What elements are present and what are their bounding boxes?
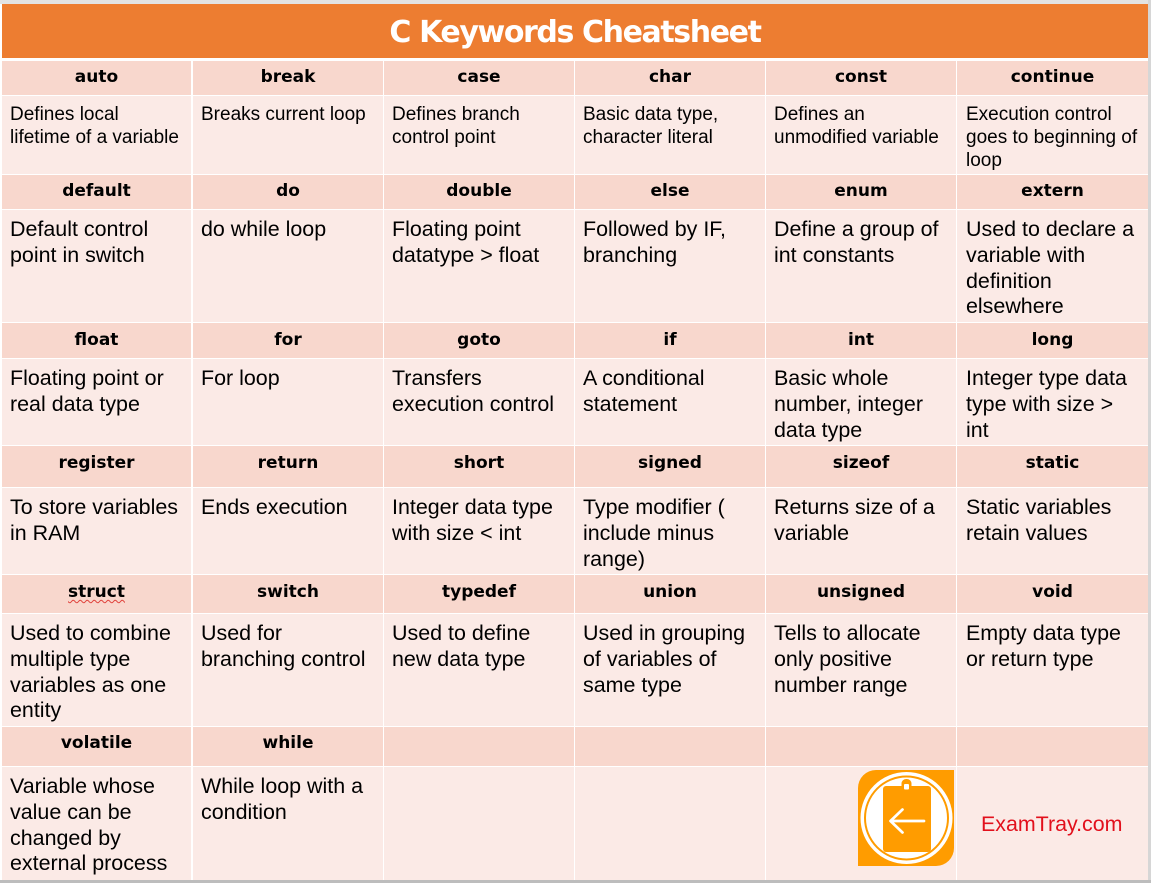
- keyword: const: const: [835, 67, 887, 87]
- description: typedef: Used to define new data type: [392, 621, 530, 671]
- description: auto: Defines local lifetime of a variable: [10, 104, 179, 148]
- description: switch: Used for branching control: [201, 621, 365, 671]
- keyword: continue: [957, 61, 1148, 95]
- description: const: [766, 96, 956, 174]
- keyword: int: int: [848, 330, 874, 350]
- empty header cell 6: [957, 727, 1148, 766]
- description: if: [575, 359, 765, 445]
- keyword: union: [575, 575, 765, 613]
- description: sizeof: [766, 488, 956, 574]
- description: register: [2, 488, 191, 574]
- keyword: unsigned: unsigned: [817, 582, 905, 602]
- empty header cell 5: [766, 727, 956, 766]
- keyword: for: for: [274, 330, 302, 350]
- description: sizeof: Returns size of a variable: [774, 495, 935, 545]
- keyword: enum: enum: [834, 181, 888, 201]
- keyword: signed: [575, 446, 765, 487]
- description: break: Breaks current loop: [201, 104, 366, 125]
- description: for: [193, 359, 383, 445]
- keyword: typedef: [384, 575, 574, 613]
- keyword: void: [957, 575, 1148, 613]
- keyword: signed: signed: [638, 453, 702, 473]
- keyword: auto: auto: [75, 67, 118, 87]
- keyword: static: static: [1026, 453, 1079, 473]
- keyword: do: [193, 175, 383, 209]
- keyword: union: union: [643, 582, 697, 602]
- description: signed: [575, 488, 765, 574]
- description: const: Defines an unmodified variable: [774, 104, 939, 148]
- keyword: while: while: [262, 733, 314, 753]
- keyword: typedef: typedef: [442, 582, 516, 602]
- description: unsigned: [766, 614, 956, 726]
- keyword: double: [384, 175, 574, 209]
- description: float: Floating point or real data type: [10, 366, 164, 416]
- keyword: else: else: [650, 181, 690, 201]
- description: continue: Execution control goes to beginning of loop: [966, 104, 1137, 171]
- keyword: default: default: [62, 181, 131, 201]
- description: unsigned: Tells to allocate only positive number range: [774, 621, 921, 697]
- keyword: char: [575, 61, 765, 95]
- keyword: sizeof: [766, 446, 956, 487]
- keyword: goto: goto: [457, 330, 501, 350]
- keyword: char: char: [649, 67, 691, 87]
- description: char: Basic data type, character literal: [583, 104, 718, 148]
- description: goto: Transfers execution control: [392, 366, 554, 416]
- description: enum: [766, 210, 956, 322]
- keyword: const: [766, 61, 956, 95]
- keyword: sizeof: sizeof: [833, 453, 889, 473]
- keyword: void: void: [1032, 582, 1073, 602]
- description: return: Ends execution: [201, 495, 348, 519]
- description: long: Integer type data type with size > int: [966, 366, 1127, 442]
- keyword: default: [2, 175, 191, 209]
- keyword: unsigned: [766, 575, 956, 613]
- description: volatile: Variable whose value can be changed by external process: [10, 774, 167, 875]
- description: double: [384, 210, 574, 322]
- description: void: [957, 614, 1148, 726]
- description: for: For loop: [201, 366, 280, 390]
- description: void: Empty data type or return type: [966, 621, 1121, 671]
- description: union: Used in grouping of variables of same type: [583, 621, 745, 697]
- description: int: [766, 359, 956, 445]
- empty header cell 4: [575, 727, 765, 766]
- keyword: case: case: [457, 67, 501, 87]
- keyword: break: [193, 61, 383, 95]
- title: C Keywords Cheatsheet: [389, 15, 761, 50]
- description: signed: Type modifier ( include minus range): [583, 495, 725, 571]
- description: do: [193, 210, 383, 322]
- title: [2, 4, 1148, 58]
- description: float: [2, 359, 191, 445]
- description: default: Default control point in switch: [10, 217, 148, 267]
- description: while: While loop with a condition: [201, 774, 363, 824]
- keyword: short: short: [454, 453, 504, 473]
- description: enum: Define a group of int constants: [774, 217, 938, 267]
- description: while: [193, 767, 383, 880]
- keyword: short: [384, 446, 574, 487]
- keyword: extern: extern: [1021, 181, 1084, 201]
- keyword: return: return: [258, 453, 318, 473]
- keyword: float: float: [75, 330, 118, 350]
- description: goto: [384, 359, 574, 445]
- keyword: if: if: [663, 330, 677, 350]
- description: short: [384, 488, 574, 574]
- keyword: enum: [766, 175, 956, 209]
- description: else: [575, 210, 765, 322]
- keyword: double: double: [446, 181, 512, 201]
- keyword: else: [575, 175, 765, 209]
- keyword: auto: [2, 61, 191, 95]
- icon: ExamTray clipboard logo: [858, 770, 954, 866]
- keyword: static: [957, 446, 1148, 487]
- description: case: [384, 96, 574, 174]
- description: char: [575, 96, 765, 174]
- keyword: float: [2, 323, 191, 358]
- description: switch: [193, 614, 383, 726]
- description: return: [193, 488, 383, 574]
- description: do: do while loop: [201, 217, 326, 241]
- keyword: do: do: [276, 181, 300, 201]
- description: static: Static variables retain values: [966, 495, 1111, 545]
- keyword: struct: [2, 575, 191, 613]
- description: if: A conditional statement: [583, 366, 705, 416]
- keyword: long: long: [1032, 330, 1073, 350]
- keyword: struct: struct: [68, 582, 125, 602]
- keyword: return: [193, 446, 383, 487]
- description: register: To store variables in RAM: [10, 495, 178, 545]
- keyword: while: [193, 727, 383, 766]
- description: else: Followed by IF, branching: [583, 217, 726, 267]
- keyword: goto: [384, 323, 574, 358]
- keyword: case: [384, 61, 574, 95]
- description: int: Basic whole number, integer data type: [774, 366, 923, 442]
- empty body cell 6: [957, 767, 1148, 880]
- description: extern: Used to declare a variable with definition elsewhere: [966, 217, 1134, 318]
- keyword: switch: [193, 575, 383, 613]
- keyword: volatile: volatile: [61, 733, 132, 753]
- keyword: extern: [957, 175, 1148, 209]
- empty body cell 4: [575, 767, 765, 880]
- keyword: break: break: [261, 67, 315, 87]
- keyword: int: [766, 323, 956, 358]
- description: case: Defines branch control point: [392, 104, 520, 148]
- keyword: for: [193, 323, 383, 358]
- description: struct: Used to combine multiple type variables as one entity: [10, 621, 171, 722]
- keyword: if: [575, 323, 765, 358]
- empty body cell 3: [384, 767, 574, 880]
- description: typedef: [384, 614, 574, 726]
- keyword: continue: continue: [1011, 67, 1094, 87]
- empty body cell 5: [766, 767, 956, 880]
- keyword: volatile: [2, 727, 191, 766]
- description: static: [957, 488, 1148, 574]
- keyword: switch: switch: [257, 582, 319, 602]
- description: double: Floating point datatype > float: [392, 217, 539, 267]
- keyword: register: [2, 446, 191, 487]
- empty header cell 3: [384, 727, 574, 766]
- keyword: long: [957, 323, 1148, 358]
- description: short: Integer data type with size < int: [392, 495, 553, 545]
- description: break: [193, 96, 383, 174]
- keyword: register: register: [58, 453, 135, 473]
- brand text: ExamTray.com: [981, 812, 1122, 836]
- description: auto: [2, 96, 191, 174]
- description: default: [2, 210, 191, 322]
- description: union: [575, 614, 765, 726]
